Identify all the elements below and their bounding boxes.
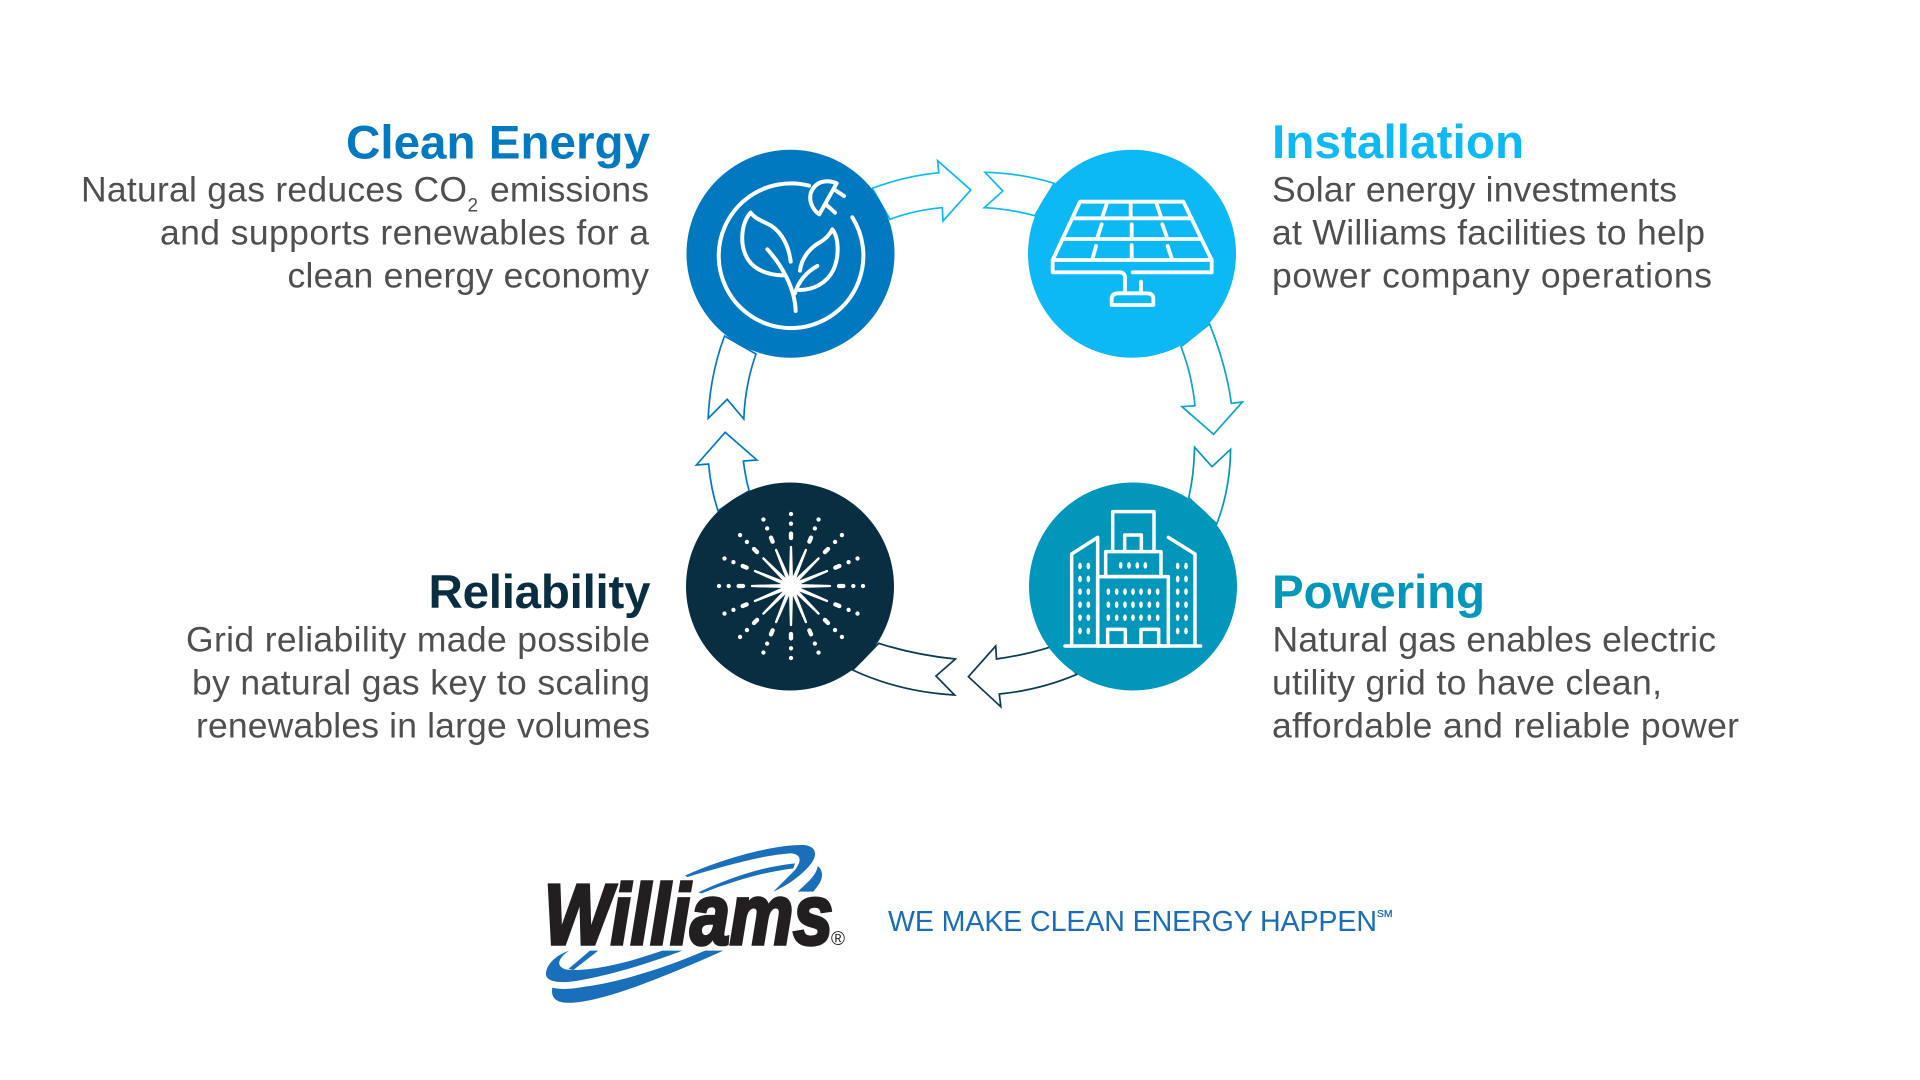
icon: reliability circle with starburst (686, 482, 894, 690)
arrow: reliability to clean energy (696, 432, 757, 511)
body text: reliability: by natural gas key to scaling (192, 662, 650, 702)
body text: powering: Natural gas enables electric (1272, 620, 1716, 660)
panel: reliability text (186, 566, 651, 745)
body text: powering: affordable and reliable power (1272, 705, 1739, 745)
body text: reliability: Grid reliability made possible (186, 620, 650, 660)
body text: powering (1272, 620, 1739, 745)
arrow tail: into installation (984, 172, 1054, 216)
logo swooshes (546, 845, 822, 1003)
logo wordmark: Williams (544, 868, 833, 963)
body text: reliability: renewables in large volumes (196, 705, 650, 745)
panel: clean energy text (81, 116, 651, 295)
heading: installation: Installation (1272, 116, 1524, 169)
body text: clean energy: clean energy economy (288, 255, 649, 295)
icon: clean energy circle with plug and leaves (686, 150, 894, 358)
heading: reliability: Reliability (428, 566, 651, 619)
body text: installation: at Williams facilities to help (1272, 212, 1705, 252)
arrow: clean energy to installation (872, 161, 971, 221)
tagline: SM (1377, 909, 1392, 920)
arrow: installation to powering (1181, 324, 1242, 434)
body text: clean energy: and supports renewables for a (160, 212, 649, 252)
tagline: WE MAKE CLEAN ENERGY HAPPEN (888, 906, 1377, 938)
body text: installation (1272, 170, 1712, 295)
panel: installation text (1272, 116, 1712, 295)
arrow: powering to reliability (968, 646, 1077, 707)
panel: powering text (1272, 566, 1739, 745)
body text: installation: power company operations (1272, 255, 1712, 295)
body text: clean energy: 2 (468, 196, 478, 216)
body text: clean energy (81, 170, 649, 295)
cycle arrows (696, 161, 1242, 707)
arrow tail: into reliability (853, 643, 955, 695)
icon: installation circle with solar panel (1028, 150, 1236, 358)
arrow tail: into powering (1189, 447, 1231, 524)
body text: clean energy: emissions (490, 170, 649, 210)
body text: powering: utility grid to have clean, (1272, 662, 1662, 702)
body text: reliability (186, 620, 650, 745)
logo: williams (544, 845, 845, 1003)
icon: powering circle with buildings (1029, 482, 1237, 690)
arrow tail: into clean energy (708, 336, 756, 419)
heading: powering: Powering (1272, 566, 1485, 619)
heading: clean energy: Clean Energy (346, 116, 651, 170)
body text: clean energy: Natural gas reduces CO (81, 170, 467, 210)
registered mark: ® (831, 929, 845, 950)
body text: installation: Solar energy investments (1272, 170, 1677, 210)
